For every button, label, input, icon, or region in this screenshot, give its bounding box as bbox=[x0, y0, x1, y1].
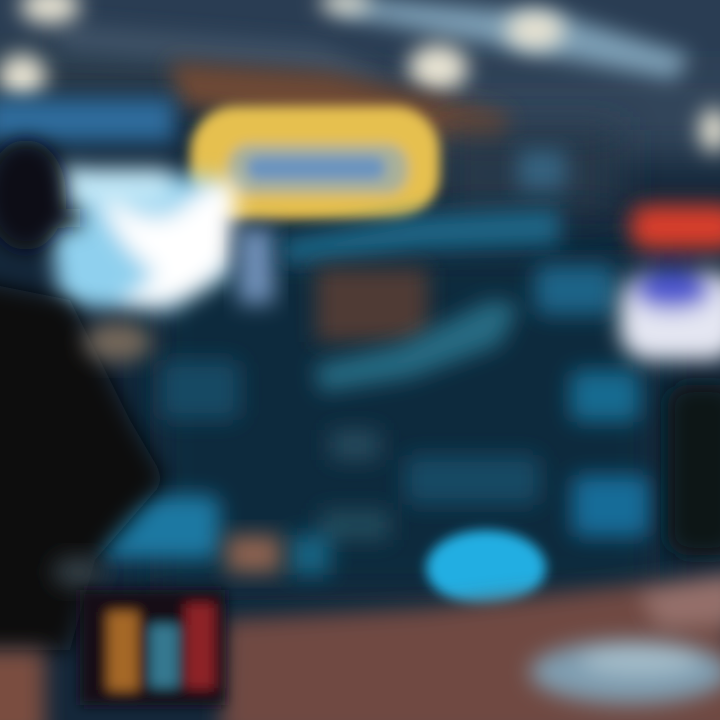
grey patch bbox=[52, 556, 104, 588]
warm patch on desk bbox=[226, 535, 281, 573]
ceiling bbox=[0, 0, 720, 160]
wooden beam bbox=[170, 62, 510, 150]
right silhouette bbox=[668, 385, 720, 555]
yellow sign bbox=[190, 106, 440, 220]
tan patch by shoulder bbox=[84, 322, 152, 362]
teal chart line bbox=[315, 300, 520, 392]
ceiling light beams bbox=[60, 0, 690, 90]
red sign and white logo bbox=[620, 205, 720, 360]
pale blue strip beside logo bbox=[238, 228, 274, 304]
phone on table bbox=[530, 640, 720, 704]
striped cup bbox=[80, 590, 225, 705]
brown recess bbox=[316, 268, 428, 342]
bright blue cloud bbox=[426, 530, 546, 606]
upper back wall bbox=[440, 130, 620, 215]
person silhouette bbox=[0, 140, 165, 650]
wooden table bbox=[0, 572, 720, 720]
display panels bbox=[92, 265, 650, 575]
small blue panel bbox=[518, 150, 566, 190]
central dark display wall bbox=[150, 250, 660, 600]
ceiling lamps bbox=[0, 0, 720, 152]
blue wall band bbox=[0, 98, 175, 142]
white bird logo bbox=[50, 165, 236, 312]
teal wall band bbox=[280, 208, 560, 265]
